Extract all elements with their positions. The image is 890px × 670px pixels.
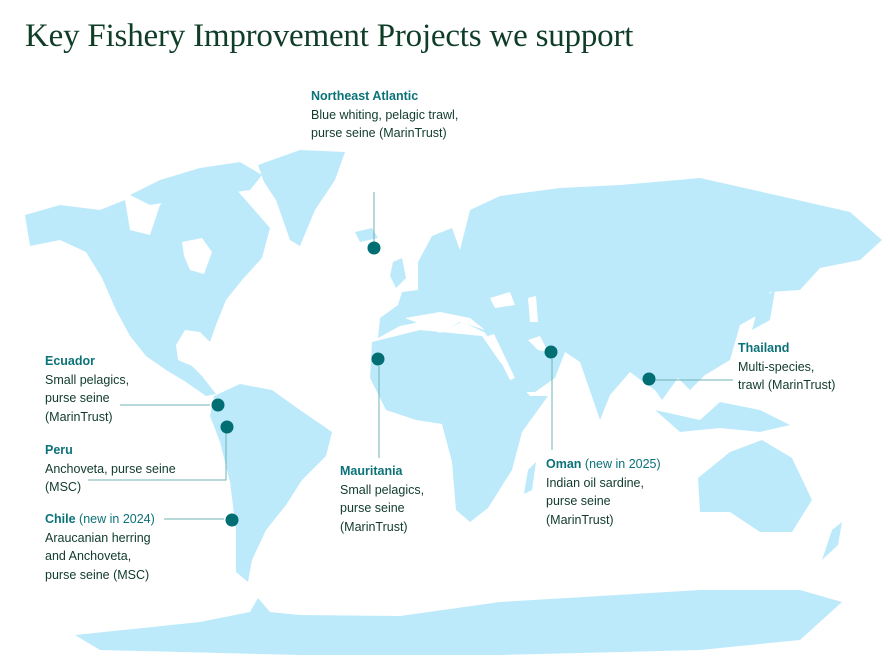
label: Mauritania: Small pelagics, (340, 482, 424, 496)
label: Mauritania: (MarinTrust) (340, 520, 408, 534)
label: Peru (45, 443, 176, 494)
label: Peru: Peru (45, 443, 73, 457)
label: Chile: Araucanian herring (45, 530, 151, 544)
label: Ecuador: Ecuador (45, 354, 95, 368)
label: Mauritania (340, 464, 424, 534)
Indonesia (655, 402, 790, 432)
North America (25, 180, 270, 396)
Greenland (258, 150, 345, 246)
label: Northeast Atlantic: Northeast Atlantic (311, 89, 418, 103)
Japan (752, 290, 775, 330)
label: Ecuador: (MarinTrust) (45, 410, 113, 424)
label: Peru: (MSC) (45, 480, 81, 494)
label: Mauritania: Mauritania (340, 464, 403, 478)
label: Peru: Anchoveta, purse seine (45, 462, 176, 476)
Arctic islands (130, 162, 262, 205)
label: Oman (546, 457, 661, 526)
Australia (698, 440, 812, 532)
label: Ecuador: purse seine (45, 391, 110, 405)
label: Ecuador: Small pelagics, (45, 372, 129, 386)
title: Key Fishery Improvement Projects we support (25, 18, 633, 54)
label: Oman: Indian oil sardine, (546, 476, 644, 490)
Madagascar (524, 462, 536, 494)
water cutouts (182, 238, 548, 380)
label: Chile: Chile (new in 2024) (45, 512, 155, 526)
dots (212, 242, 656, 526)
label: Thailand: Thailand (738, 341, 789, 355)
Africa (370, 330, 548, 522)
UK (390, 258, 406, 288)
label: Thailand: trawl (MarinTrust) (738, 378, 835, 392)
label: Chile (45, 512, 155, 582)
label: Chile: purse seine (MSC) (45, 568, 149, 582)
label: Northeast Atlantic (311, 89, 458, 140)
label: Northeast Atlantic: purse seine (MarinTrust) (311, 126, 447, 140)
label: Thailand (738, 341, 835, 392)
label: Ecuador (45, 354, 129, 424)
Iceland (355, 228, 378, 242)
label: Oman: Oman (new in 2025) (546, 457, 661, 471)
label: Oman: purse seine (546, 494, 611, 508)
South America (210, 384, 332, 582)
label: Northeast Atlantic: Blue whiting, pelagic trawl, (311, 108, 458, 122)
New Zealand (822, 522, 842, 560)
Eurasia (378, 178, 882, 420)
label: Oman: (MarinTrust) (546, 512, 614, 526)
Antarctica (75, 590, 842, 655)
label: Chile: and Anchoveta, (45, 549, 131, 563)
label: Thailand: Multi-species, (738, 360, 814, 374)
label: Mauritania: purse seine (340, 501, 405, 515)
